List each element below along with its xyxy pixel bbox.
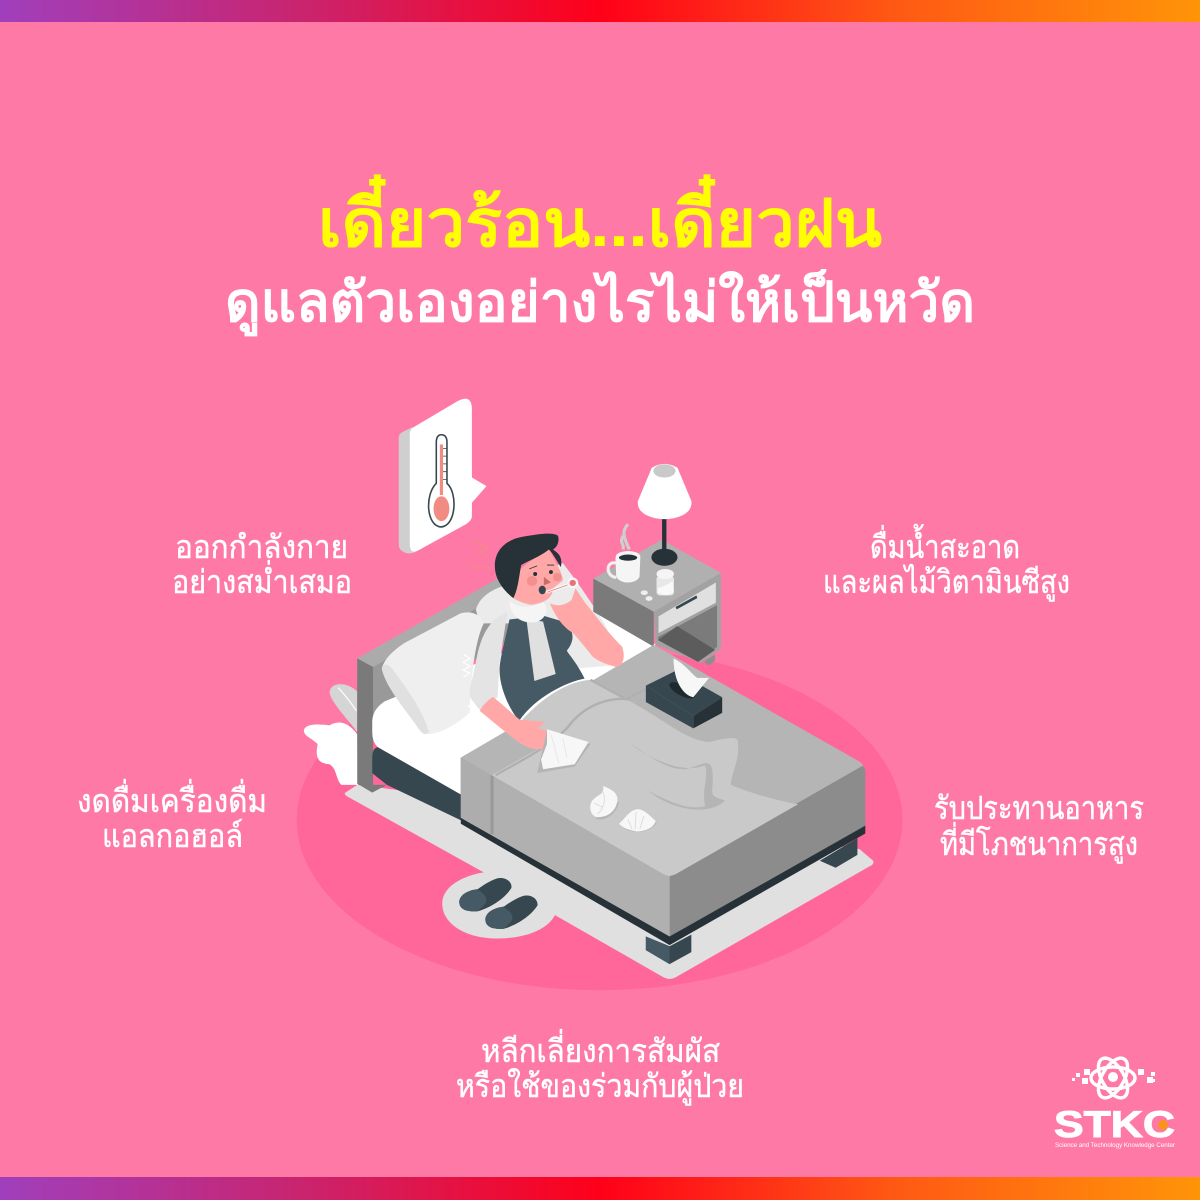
thermometer glyph [429, 435, 454, 527]
thermometer speech bubble [399, 399, 487, 553]
logo wordmark: STKC [1054, 1104, 1175, 1145]
slippers [459, 878, 538, 929]
tip: no alcohol: แอลกอฮอล์ [102, 818, 243, 854]
tip: avoid contact: หรือใช้ของร่วมกับผู้ป่วย [456, 1068, 744, 1106]
title: เดี๋ยวร้อน...เดี๋ยวฝน [318, 174, 882, 260]
shirt sleeve [470, 612, 507, 711]
coffee mug [608, 524, 640, 583]
logo tagline: Science and Technology Knowledge Center [1055, 1143, 1175, 1149]
headboard [357, 579, 511, 793]
tissue box [646, 658, 722, 728]
crumpled tissue two [619, 809, 657, 832]
tip: avoid contact: หลีกเลี่ยงการสัมผัส [481, 1029, 720, 1069]
hair [495, 534, 561, 598]
lamp [638, 464, 691, 566]
tip: nutrition: รับประทานอาหาร [934, 790, 1144, 826]
scarf [509, 600, 546, 623]
sock behind bed [330, 684, 357, 732]
top gradient bar [0, 0, 1200, 22]
rug [345, 785, 873, 979]
floor ellipse [297, 649, 902, 990]
person [470, 534, 624, 749]
tip: nutrition [934, 790, 1144, 864]
arm on blanket [480, 697, 555, 749]
tip: water and fruit [823, 524, 1070, 602]
front pillow [382, 612, 484, 734]
nightstand [593, 540, 721, 665]
pill jar [641, 569, 674, 601]
thermometer in mouth [546, 577, 578, 592]
facial features [527, 565, 562, 594]
tissue in hand [537, 729, 591, 773]
bed legs [646, 838, 857, 964]
tip: exercise [172, 529, 352, 600]
logo orange dot [1158, 1120, 1168, 1130]
raised arm [550, 588, 624, 667]
hanging scarf [526, 620, 556, 681]
tip: nutrition: ที่มีโภชนาการสูง [940, 822, 1138, 864]
bed base left [372, 747, 464, 822]
white cloth on floor [304, 723, 358, 785]
subtitle: ดูแลตัวเองอย่างไรไม่ให้เป็นหวัด [225, 269, 975, 337]
face [509, 549, 563, 605]
tip: no alcohol [77, 779, 267, 854]
tip: no alcohol: งดดื่มเครื่องดื่ม [77, 779, 267, 819]
vest [500, 616, 585, 721]
logo atom icon [1091, 1053, 1135, 1103]
tip: water and fruit: ดื่มน้ำสะอาด [870, 524, 1020, 565]
blanket [461, 645, 865, 945]
tip: avoid contact [456, 1029, 744, 1106]
back pillow [476, 563, 614, 668]
tip: exercise: ออกกำลังกาย [175, 529, 348, 565]
logo pixel squares [1072, 1069, 1155, 1084]
bottom gradient bar [0, 1177, 1200, 1200]
illustration: sick person in bed [297, 399, 902, 990]
tip: water and fruit: และผลไม้วิตามินซีสูง [823, 564, 1070, 602]
pain marks [467, 540, 491, 570]
logo: STKC [1054, 1053, 1175, 1149]
mattress sheet [372, 612, 656, 795]
tip: exercise: อย่างสม่ำเสมอ [172, 560, 352, 600]
crumpled tissue one [590, 786, 619, 819]
